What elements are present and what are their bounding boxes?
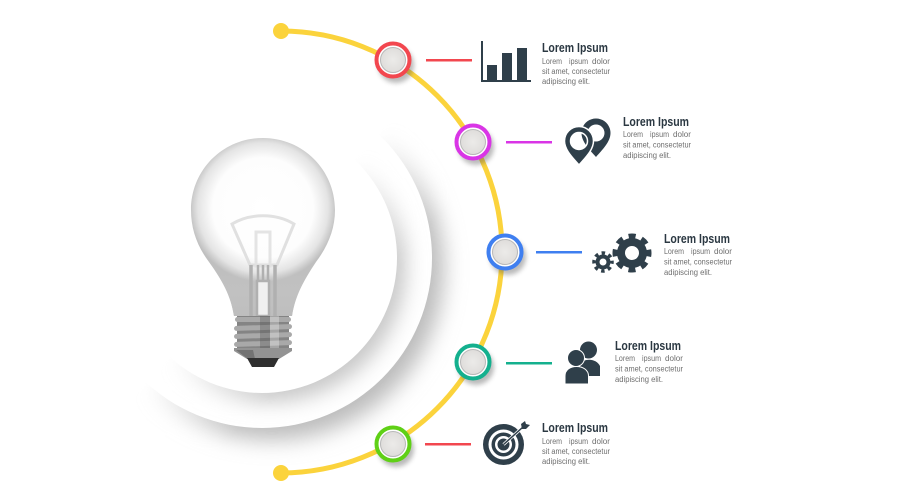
text block 5: ipsum bbox=[569, 437, 588, 446]
glass neck shading bbox=[218, 274, 308, 316]
text block 3: dolor bbox=[714, 247, 732, 256]
text block 3: ipsum bbox=[691, 247, 710, 256]
text block 3: sit amet, consectetur bbox=[664, 258, 732, 266]
text block 3: adipiscing elit. bbox=[664, 268, 712, 277]
text block 2: Lorem bbox=[623, 130, 643, 139]
text block 1: adipiscing elit. bbox=[542, 77, 590, 86]
connector: red lower bbox=[425, 443, 471, 446]
text block 1: Lorem Ipsum bbox=[542, 41, 608, 55]
icon: people bbox=[565, 342, 600, 384]
bulb glass bbox=[191, 138, 335, 316]
text block 2: adipiscing elit. bbox=[623, 151, 671, 160]
text block 4: Lorem Ipsum bbox=[615, 339, 681, 353]
text block 5: Lorem bbox=[542, 437, 562, 446]
text block 5: dolor bbox=[592, 437, 610, 446]
arc start dot bbox=[273, 23, 289, 39]
node: green bbox=[376, 428, 414, 467]
icon: bar chart bbox=[481, 41, 531, 82]
text block 4 bbox=[615, 339, 683, 384]
text block 1: ipsum bbox=[569, 57, 588, 66]
connector: red bbox=[426, 59, 472, 62]
outer disc with crescent shadow bbox=[162, 149, 456, 452]
yellow timeline arc bbox=[273, 23, 502, 481]
node: magenta bbox=[456, 126, 494, 165]
node: teal bbox=[456, 346, 494, 385]
text block 5: Lorem Ipsum bbox=[542, 421, 608, 435]
text block 2: dolor bbox=[673, 130, 691, 139]
text block 5: adipiscing elit. bbox=[542, 457, 590, 466]
text block 1 bbox=[542, 41, 610, 86]
screw base bbox=[234, 316, 292, 367]
text block 2: Lorem Ipsum bbox=[623, 115, 689, 129]
light bulb bbox=[191, 138, 335, 367]
connector: magenta bbox=[506, 141, 552, 144]
text block 1: sit amet, consectetur bbox=[542, 67, 610, 76]
text block 4: dolor bbox=[665, 354, 683, 363]
text block 4: sit amet, consectetur bbox=[615, 364, 683, 374]
text block 4: ipsum bbox=[642, 354, 661, 363]
connector: teal bbox=[506, 362, 552, 364]
text block 5: sit amet, consectetur bbox=[542, 447, 610, 456]
text block 3: Lorem bbox=[664, 247, 684, 256]
text block 2 bbox=[623, 115, 691, 160]
node: blue bbox=[488, 236, 526, 275]
node: red bbox=[376, 44, 414, 83]
icon: target bbox=[483, 421, 530, 465]
inner disc with crescent shadow bbox=[190, 178, 416, 412]
connector: blue bbox=[536, 251, 582, 254]
filament bbox=[232, 216, 294, 266]
icon: gears bbox=[594, 236, 649, 271]
text block 2: ipsum bbox=[650, 130, 669, 139]
text block 1: dolor bbox=[592, 57, 610, 66]
text block 5 bbox=[542, 421, 610, 466]
text block 3: Lorem Ipsum bbox=[664, 232, 730, 246]
text block 4: adipiscing elit. bbox=[615, 375, 663, 384]
text block 1: Lorem bbox=[542, 57, 562, 66]
filament stems bbox=[251, 265, 275, 316]
text block 2: sit amet, consectetur bbox=[623, 140, 691, 150]
text block 3 bbox=[664, 232, 732, 277]
text block 4: Lorem bbox=[615, 354, 635, 363]
arc end dot bbox=[273, 465, 289, 481]
icon: map pins bbox=[564, 118, 610, 165]
